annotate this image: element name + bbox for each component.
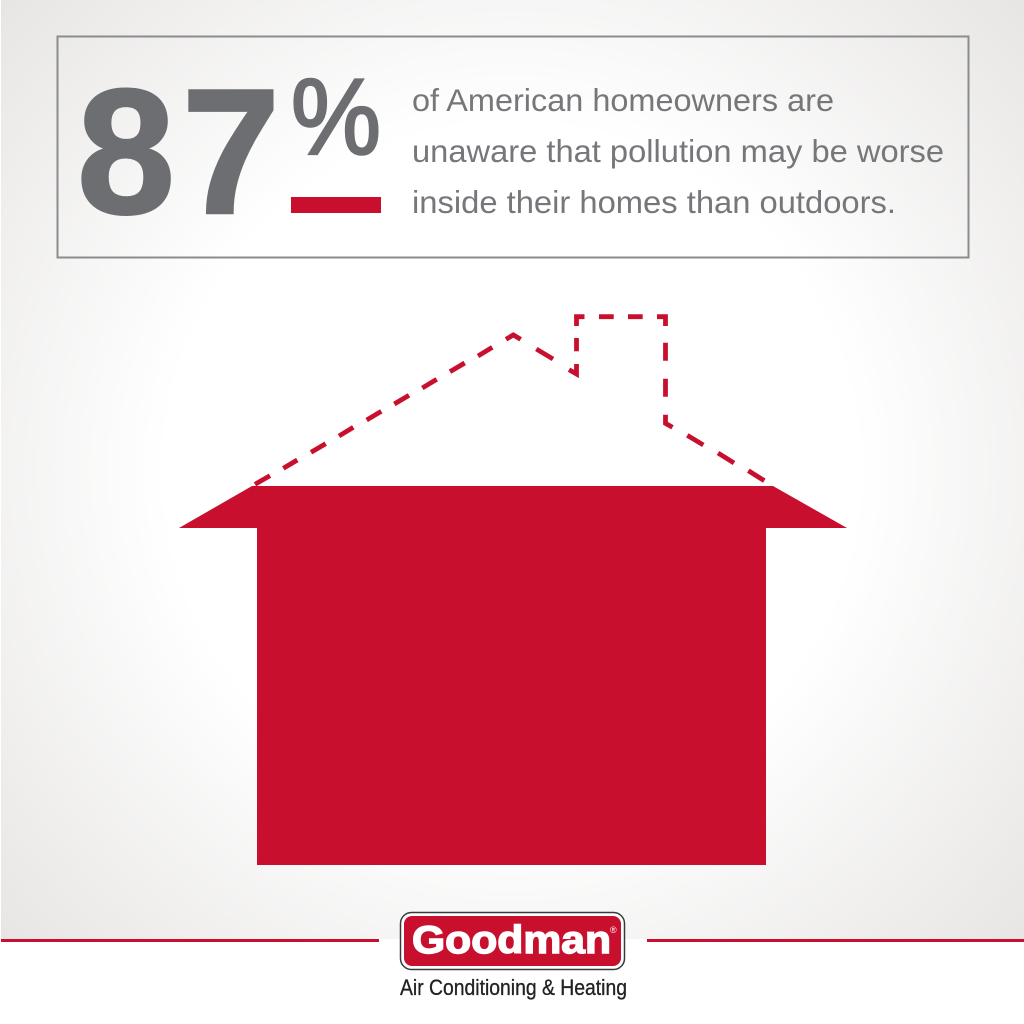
logo tagline: Air Conditioning & Heating	[400, 975, 627, 1000]
logo badge	[400, 912, 624, 970]
statistic description	[412, 82, 944, 220]
registered mark: ®	[610, 925, 617, 935]
statistic number: 87: 7	[182, 52, 280, 251]
solid house body	[179, 486, 847, 865]
footer rule left	[1, 939, 379, 942]
icon: house with dashed roof	[179, 317, 847, 865]
statistic number: 87	[77, 52, 280, 251]
statistic number: 87: 8	[77, 52, 175, 251]
panel border	[58, 36, 968, 258]
red bar	[291, 197, 381, 213]
footer rule right	[647, 939, 1024, 942]
statistic description: inside their homes than outdoors.	[412, 184, 896, 220]
logo wordmark: Goodman	[412, 919, 611, 962]
statistic description: of American homeowners are	[412, 82, 834, 118]
logo red field	[404, 916, 621, 966]
dashed roof outline	[255, 317, 764, 484]
percent sign: %	[291, 56, 381, 177]
statistic description: unaware that pollution may be worse	[412, 133, 944, 169]
panel: statistic	[58, 36, 968, 258]
logo: Goodman	[400, 912, 627, 1000]
